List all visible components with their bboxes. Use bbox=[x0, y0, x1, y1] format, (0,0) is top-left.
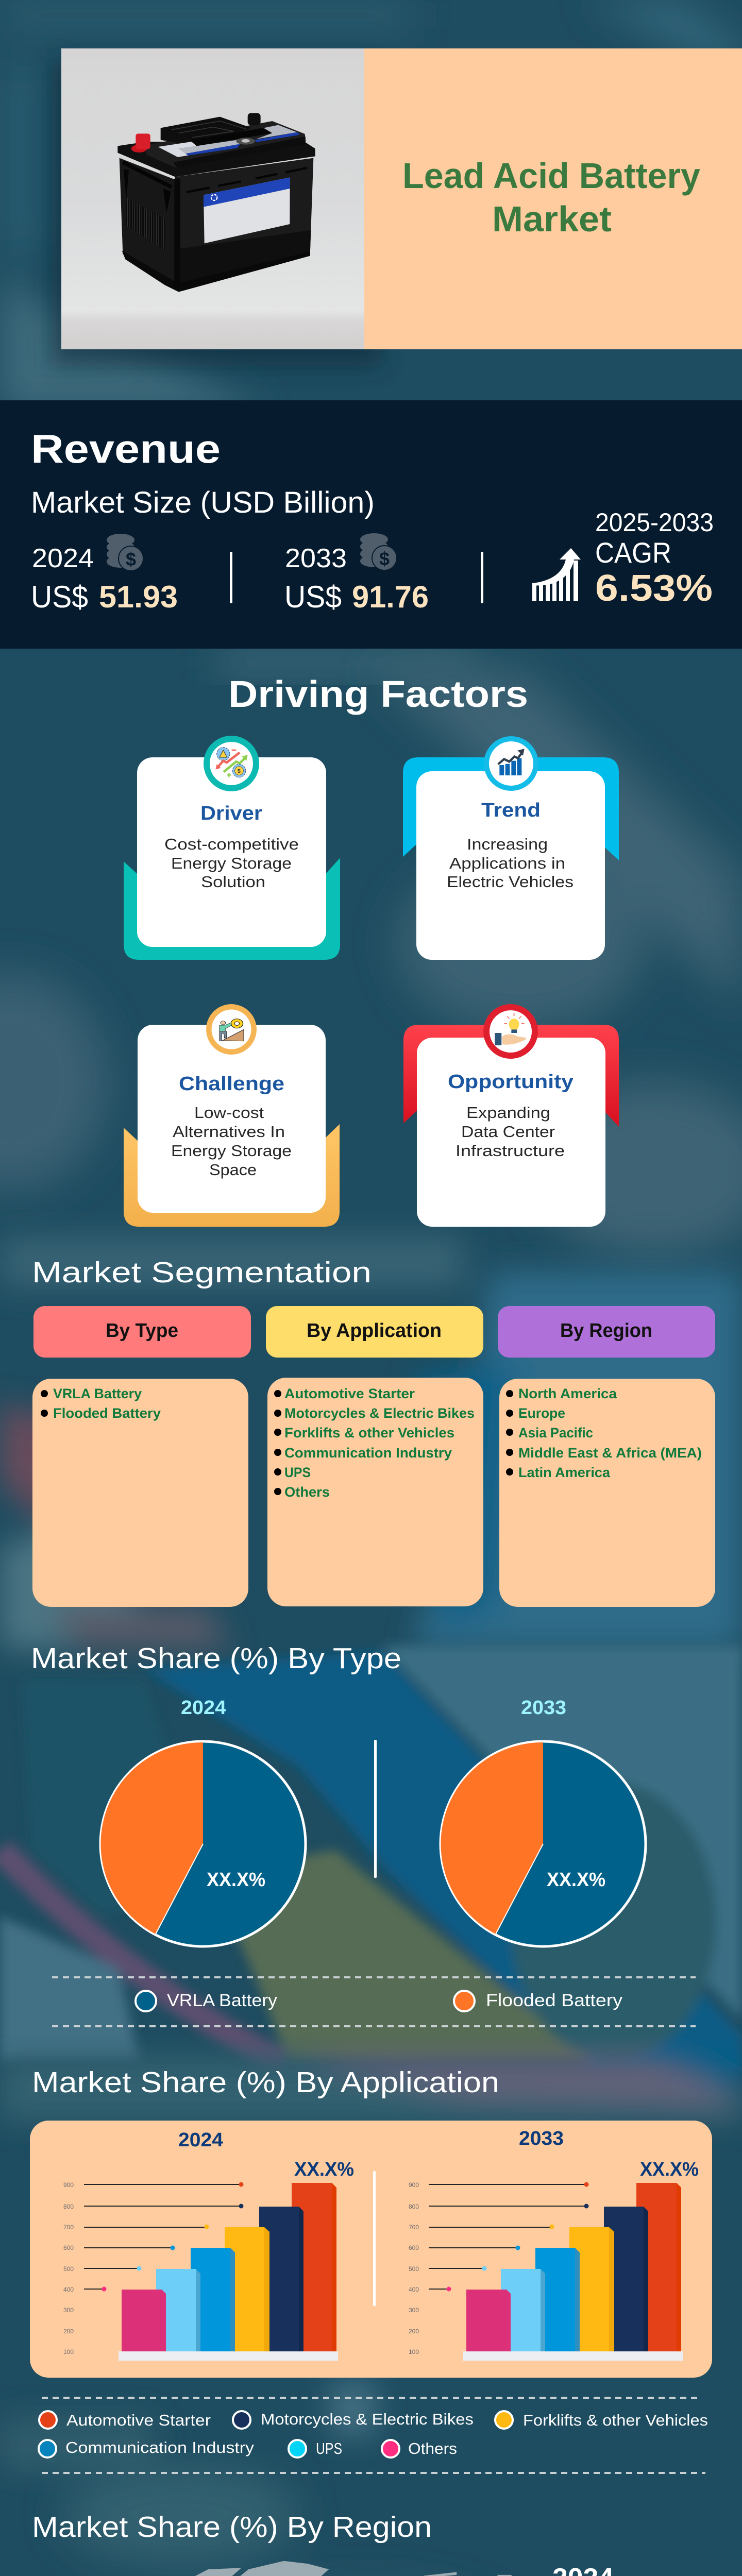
bar chart: 2024: 900 bbox=[63, 2181, 74, 2189]
segment column: by type bbox=[32, 1306, 251, 1607]
challenge text: Low-cost bbox=[194, 1104, 264, 1122]
trend text: Applications in bbox=[449, 854, 565, 872]
segment column: by type: By Type bbox=[106, 1320, 178, 1342]
driver text: Solution bbox=[201, 873, 265, 891]
2024 value block: 2024 bbox=[32, 544, 94, 573]
list: region: Latin America bbox=[518, 1465, 611, 1480]
driver text: Energy Storage bbox=[171, 854, 292, 872]
divider bbox=[373, 2171, 376, 2306]
trend heading: Trend bbox=[481, 800, 541, 821]
opportunity text: Infrastructure bbox=[456, 1142, 565, 1160]
panel: application charts bbox=[30, 2121, 712, 2378]
heading: driving factors: Driving Factors bbox=[228, 674, 528, 715]
challenge text: Alternatives In bbox=[173, 1123, 285, 1141]
icon: challenge bbox=[206, 1004, 257, 1055]
bar chart: 2024: 300 bbox=[63, 2307, 74, 2314]
bar chart: 2033: 100 bbox=[409, 2348, 419, 2355]
bar chart: 2033: XX.X% bbox=[640, 2159, 699, 2180]
hero panel bbox=[52, 48, 742, 366]
2033 value block: US$ bbox=[284, 580, 342, 614]
bar chart: 2033: 200 bbox=[409, 2328, 419, 2335]
legend: application bbox=[39, 2410, 708, 2458]
2033 value block: 2033 bbox=[285, 544, 347, 573]
bar chart: 2024: 500 bbox=[63, 2265, 74, 2273]
title: Lead Acid Battery bbox=[402, 156, 700, 196]
list: type: VRLA Battery bbox=[53, 1386, 142, 1401]
trend text: Increasing bbox=[467, 835, 548, 853]
legend: type bbox=[136, 1991, 622, 2011]
bar chart: 2024: 600 bbox=[63, 2244, 74, 2251]
challenge text: Space bbox=[209, 1161, 257, 1179]
trend text bbox=[447, 835, 574, 891]
segment column: by application bbox=[266, 1306, 483, 1606]
card: trend bbox=[403, 736, 619, 960]
list: application: Forklifts & other Vehicles bbox=[284, 1425, 454, 1440]
driver text: Cost-competitive bbox=[164, 835, 299, 853]
revenue heading: Revenue bbox=[31, 426, 221, 471]
icon: coins 2033: $ bbox=[379, 548, 390, 569]
pie chart: 2024 bbox=[100, 1697, 306, 1946]
card: challenge bbox=[124, 1004, 340, 1227]
bar chart: 2033: 600 bbox=[409, 2244, 419, 2251]
icon: growth arrow bbox=[532, 548, 581, 601]
pie chart: 2033: 2033 bbox=[521, 1697, 566, 1719]
list: region: Asia Pacific bbox=[518, 1425, 593, 1440]
list: application: Communication Industry bbox=[284, 1445, 452, 1461]
legend: application: Others bbox=[408, 2439, 457, 2458]
list: region: North America bbox=[518, 1386, 617, 1401]
bar chart: 2024: 800 bbox=[63, 2203, 74, 2210]
bar chart: 2033: 800 bbox=[409, 2203, 419, 2210]
list: region: Europe bbox=[518, 1405, 565, 1421]
divider bbox=[481, 552, 483, 603]
list: application: Others bbox=[284, 1484, 330, 1500]
icon: coins 2024 bbox=[107, 534, 143, 571]
bar chart: 2024: 200 bbox=[63, 2328, 74, 2335]
CAGR block: 6.53% bbox=[595, 568, 713, 609]
legend: type: VRLA Battery bbox=[167, 1991, 277, 2010]
divider bbox=[374, 1740, 377, 1878]
title bbox=[402, 156, 700, 239]
CAGR block bbox=[595, 508, 714, 609]
list: type: Flooded Battery bbox=[53, 1405, 161, 1421]
segment column: by region: By Region bbox=[560, 1320, 652, 1342]
challenge text: Energy Storage bbox=[171, 1142, 292, 1160]
heading: market share by application: Market Share (%) By Application bbox=[32, 2066, 499, 2099]
divider bbox=[230, 552, 232, 603]
segment column: by application: By Application bbox=[307, 1320, 442, 1342]
bar chart: 2024: 100 bbox=[63, 2348, 74, 2355]
icon: coins 2033 bbox=[360, 533, 397, 570]
CAGR block: CAGR bbox=[595, 536, 671, 569]
legend: application: Forklifts & other Vehicles bbox=[523, 2411, 708, 2429]
bar chart: 2033: 700 bbox=[409, 2224, 419, 2231]
icon: coins 2024: $ bbox=[126, 549, 136, 570]
CAGR block: 2025-2033 bbox=[595, 508, 714, 537]
bar chart: 2024: 400 bbox=[63, 2286, 74, 2293]
challenge text bbox=[171, 1104, 292, 1179]
market size label: Market Size (USD Billion) bbox=[31, 486, 375, 519]
opportunity text: Data Center bbox=[461, 1123, 555, 1141]
heading: market share by type: Market Share (%) By Type bbox=[31, 1642, 401, 1675]
legend: application: Communication Industry bbox=[65, 2438, 255, 2456]
revenue band bbox=[0, 400, 742, 649]
2033 value block bbox=[284, 544, 429, 614]
card: opportunity bbox=[403, 1004, 619, 1227]
pie chart: 2033: XX.X% bbox=[547, 1869, 605, 1891]
heading: market segmentation: Market Segmentation bbox=[32, 1256, 372, 1289]
pie chart: 2024: 2024 bbox=[181, 1697, 226, 1719]
icon: driver bbox=[204, 736, 259, 791]
pie chart: 2033 bbox=[441, 1697, 646, 1946]
bar chart: 2033: 300 bbox=[409, 2307, 419, 2314]
title panel bbox=[364, 48, 742, 349]
driver heading: Driver bbox=[200, 803, 262, 824]
legend: type: Flooded Battery bbox=[486, 1991, 622, 2010]
bar chart: 2024: XX.X% bbox=[294, 2159, 354, 2180]
bar chart: 2024: 2024 bbox=[178, 2129, 223, 2151]
segment column: by region bbox=[498, 1306, 715, 1607]
2033 value block: 91.76 bbox=[352, 580, 429, 614]
heading: market share by region: Market Share (%) By Region bbox=[32, 2511, 432, 2544]
driver text bbox=[164, 835, 299, 891]
list: region: Middle East & Africa (MEA) bbox=[518, 1445, 702, 1461]
icon: opportunity bbox=[483, 1004, 538, 1059]
bar chart: 2033: 400 bbox=[409, 2286, 419, 2293]
bar chart: 2024 bbox=[63, 2129, 354, 2361]
bar chart: 2024: 700 bbox=[63, 2224, 74, 2231]
2024 value block bbox=[31, 544, 178, 614]
list: region bbox=[499, 1379, 715, 1607]
card: driver bbox=[124, 736, 340, 960]
2024 value block: 51.93 bbox=[99, 580, 178, 614]
icon: trend bbox=[484, 736, 538, 791]
bar chart: 2033: 2033 bbox=[519, 2128, 564, 2149]
2024 value block: US$ bbox=[31, 580, 88, 614]
bar chart: 2033: 900 bbox=[409, 2181, 419, 2189]
opportunity heading: Opportunity bbox=[448, 1071, 574, 1093]
bar chart: 2033 bbox=[409, 2128, 699, 2361]
opportunity text bbox=[456, 1104, 565, 1160]
opportunity text: Expanding bbox=[466, 1104, 550, 1122]
icon: driver: $ bbox=[238, 768, 241, 774]
pie chart: 2024: XX.X% bbox=[207, 1869, 265, 1891]
list: application bbox=[267, 1378, 483, 1606]
title: Market bbox=[492, 199, 612, 239]
bar chart: 2033: 500 bbox=[409, 2265, 419, 2273]
world map bbox=[71, 2561, 667, 2576]
legend: application: UPS bbox=[316, 2439, 342, 2458]
list: application: Automotive Starter bbox=[284, 1386, 415, 1401]
legend: application: Motorcycles & Electric Bikes bbox=[261, 2410, 474, 2428]
list: type bbox=[32, 1379, 248, 1607]
battery product photo bbox=[61, 48, 364, 349]
list: application: Motorcycles & Electric Bikes bbox=[284, 1405, 475, 1421]
list: application: UPS bbox=[284, 1465, 311, 1480]
challenge heading: Challenge bbox=[179, 1073, 284, 1095]
legend: application: Automotive Starter bbox=[66, 2411, 211, 2429]
trend text: Electric Vehicles bbox=[447, 873, 574, 891]
